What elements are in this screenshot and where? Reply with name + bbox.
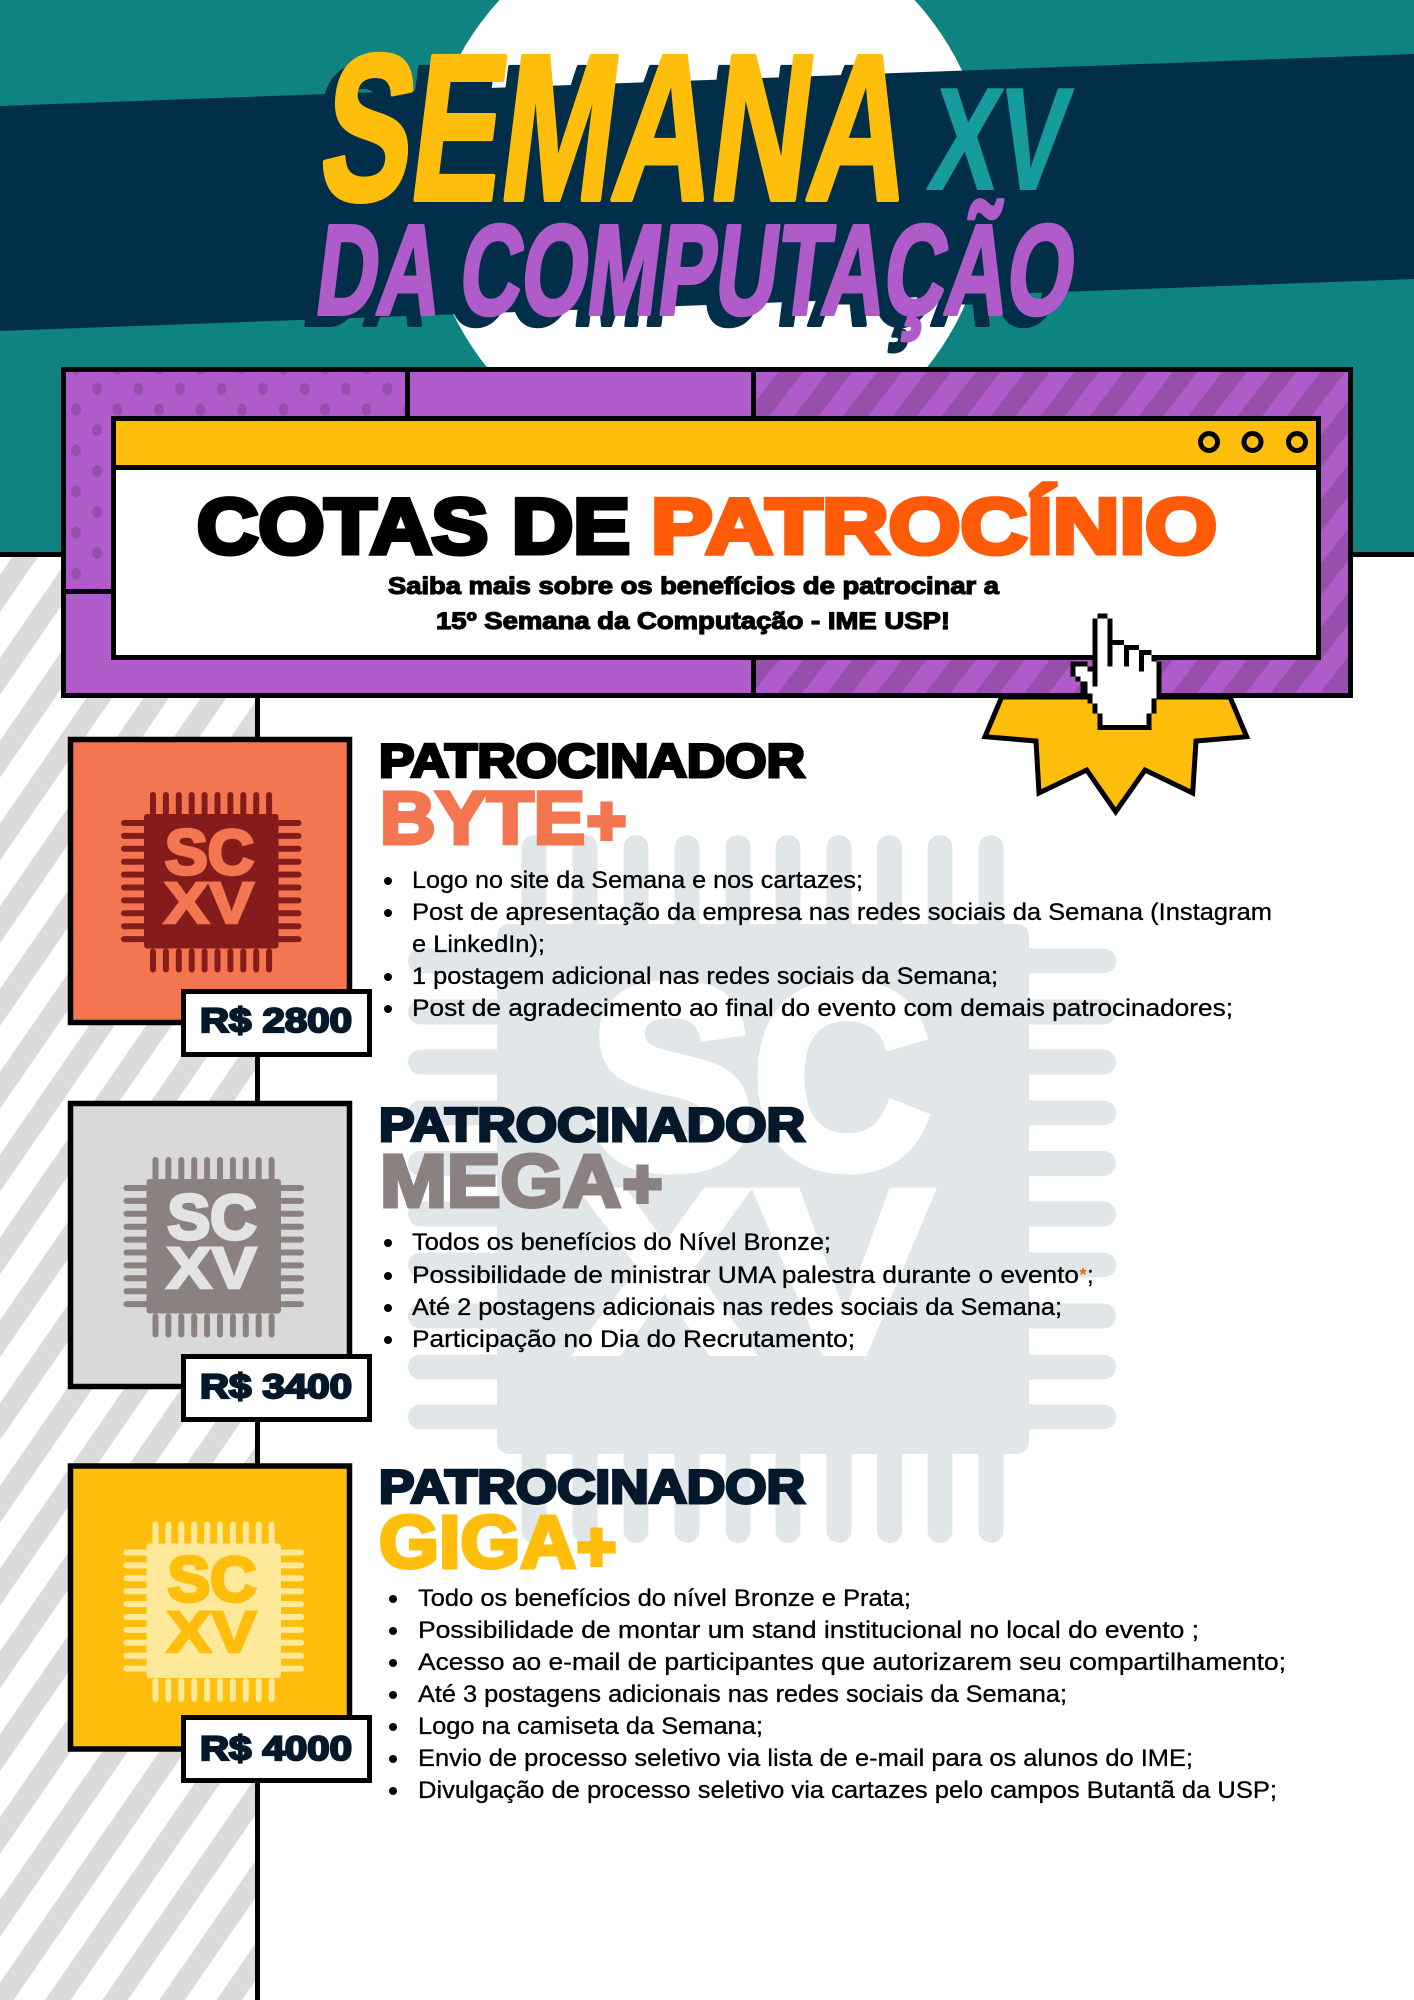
icon: Byte chip (121, 792, 302, 972)
subtitle: 15º Semana da Computação - IME USP! (436, 608, 950, 635)
text block: Giga tier: Acesso ao e-mail de participantes que autorizarem seu compartilhamento; (418, 1649, 1286, 1676)
starburst top edge redraw (1000, 693, 1232, 698)
panel: Mega card (70, 1104, 370, 1420)
price tag: Byte (184, 992, 370, 1054)
dark navy diagonal band (0, 54, 1414, 331)
heading: PATROCÍNIO: PATROCÍNIO (651, 482, 1217, 570)
panel: browser window (114, 418, 1318, 658)
title: SEMANA: SEMANA (310, 12, 924, 244)
icon: Mega chip (124, 1157, 304, 1338)
text block: Mega tier: Possibilidade de ministrar UMA palestra durante o evento (412, 1262, 1079, 1289)
panel: Giga card (70, 1466, 370, 1780)
teal header background (0, 0, 1414, 555)
text block: Giga tier: Possibilidade de montar um stand institucional no local do evento ; (418, 1617, 1199, 1644)
text block: Giga tier: PATROCINADOR (379, 1460, 805, 1513)
text block: Giga tier (379, 1460, 1286, 1804)
white page body (0, 557, 1414, 2000)
title: XV: XV (922, 57, 1078, 220)
icon: yellow starburst (985, 697, 1247, 812)
header bottom edge (0, 552, 1414, 557)
text block: Byte tier: + (587, 783, 626, 859)
white circle behind title (425, 0, 989, 473)
title shadow (297, 23, 1071, 353)
striped left column (0, 557, 255, 2000)
panel: purple window frame (61, 367, 1350, 697)
text block: Byte tier: e LinkedIn); (412, 931, 545, 958)
text block: Mega tier: ; (1087, 1262, 1094, 1289)
subtitle: Saiba mais sobre os benefícios de patrocinar a (388, 573, 1000, 600)
watermark chip: XV (575, 1140, 934, 1404)
text block: Mega tier: Todos os benefícios do Nível Bronze; (412, 1229, 831, 1256)
price tag: Giga (184, 1718, 370, 1780)
text block: Mega tier: Participação no Dia do Recrutamento; (412, 1326, 855, 1353)
watermark chip (408, 835, 1116, 1543)
text block: Mega tier: MEGA (380, 1140, 621, 1222)
text block: Byte tier (379, 734, 1272, 1022)
icon: pixel hand cursor (1071, 613, 1161, 730)
text block: Giga tier: Logo na camiseta da Semana; (418, 1713, 763, 1740)
subtitle (388, 573, 1000, 635)
text block: Giga tier: Envio de processo seletivo via lista de e-mail para os alunos do IME; (418, 1745, 1193, 1772)
text block: Mega tier (379, 1098, 1094, 1353)
icon: Giga chip: SC (168, 1545, 256, 1615)
text block: Byte tier: BYTE (380, 776, 585, 860)
text block: Byte tier: Post de agradecimento ao final do evento com demais patrocinadores; (412, 995, 1233, 1022)
price tag: Byte: R$ 2800 (200, 1002, 352, 1040)
icon: Byte chip: SC (165, 818, 254, 888)
text block: Byte tier: Post de apresentação da empresa nas redes sociais da Semana (Instagram (412, 899, 1272, 926)
heading: COTAS DE: COTAS DE (197, 482, 630, 570)
text block: Byte tier: Logo no site da Semana e nos cartazes; (412, 867, 863, 894)
icon: Mega chip: XV (166, 1236, 257, 1301)
price tag: Mega (184, 1356, 370, 1420)
text block: Giga tier: GIGA (379, 1500, 576, 1584)
icon: Giga chip (124, 1522, 304, 1702)
panel: Byte card (70, 740, 370, 1054)
text block: Byte tier: 1 postagem adicional nas redes sociais da Semana; (412, 963, 998, 990)
text block: Giga tier: + (577, 1509, 616, 1585)
text block: Mega tier: + (623, 1146, 662, 1222)
text block: Mega tier: * (1080, 1265, 1087, 1285)
text block: Giga tier: Todo os benefícios do nível Bronze e Prata; (418, 1585, 911, 1612)
icon: Giga chip: XV (166, 1600, 257, 1665)
text block: Giga tier: Divulgação de processo seletivo via cartazes pelo campos Butantã da USP; (418, 1777, 1277, 1804)
icon: Mega chip: SC (168, 1183, 256, 1253)
price tag: Mega: R$ 3400 (200, 1368, 352, 1406)
watermark chip: SC (590, 932, 930, 1221)
price tag: Giga: R$ 4000 (200, 1730, 352, 1768)
title shadow: SEMANA (297, 23, 911, 255)
text block: Giga tier: Até 3 postagens adicionais nas redes sociais da Semana; (418, 1681, 1067, 1708)
text block: Byte tier: PATROCINADOR (379, 734, 805, 787)
vertical timeline line (255, 698, 260, 2000)
text block: Mega tier: PATROCINADOR (379, 1098, 805, 1151)
text block: Mega tier: Até 2 postagens adicionais nas redes sociais da Semana; (412, 1294, 1062, 1321)
icon: Byte chip: XV (164, 871, 254, 936)
